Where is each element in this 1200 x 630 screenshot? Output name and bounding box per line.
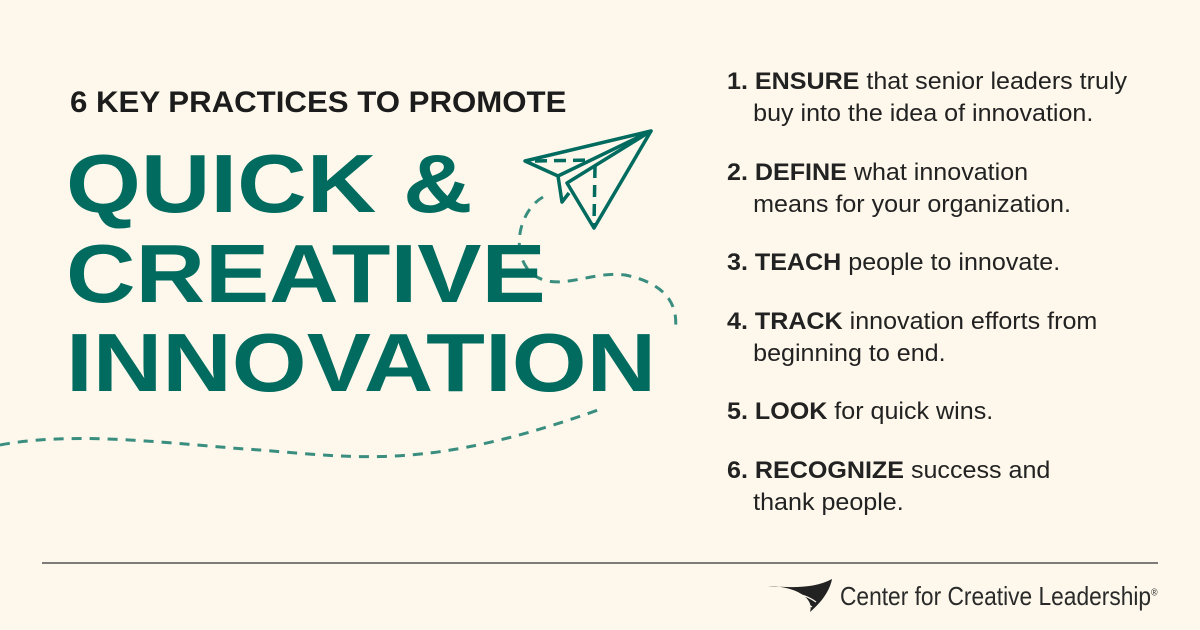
dashed trail bbox=[0, 197, 676, 457]
list of practices: beginning to end. bbox=[753, 340, 946, 367]
logo text: Center for Creative Leadership® bbox=[840, 581, 1158, 611]
main title: CREATIVE bbox=[66, 226, 546, 320]
list of practices: buy into the idea of innovation. bbox=[753, 100, 1093, 127]
main title: QUICK & bbox=[66, 137, 473, 230]
list of practices: means for your organization. bbox=[753, 191, 1071, 218]
list of practices: thank people. bbox=[753, 489, 904, 516]
list of practices: 1. ENSURE that senior leaders truly bbox=[727, 68, 1127, 95]
list of practices: 3. TEACH people to innovate. bbox=[727, 249, 1060, 276]
list of practices: 6. RECOGNIZE success and bbox=[727, 457, 1050, 484]
icon: paper plane bbox=[525, 131, 651, 228]
list of practices bbox=[727, 68, 1127, 516]
list of practices: 5. LOOK for quick wins. bbox=[727, 398, 993, 425]
list of practices: 4. TRACK innovation efforts from bbox=[727, 308, 1097, 335]
main title: INNOVATION bbox=[66, 316, 656, 409]
subtitle: 6 KEY PRACTICES TO PROMOTE bbox=[70, 86, 566, 119]
icon: logo wing bbox=[768, 579, 832, 612]
main title bbox=[66, 137, 656, 409]
list of practices: 2. DEFINE what innovation bbox=[727, 159, 1028, 186]
